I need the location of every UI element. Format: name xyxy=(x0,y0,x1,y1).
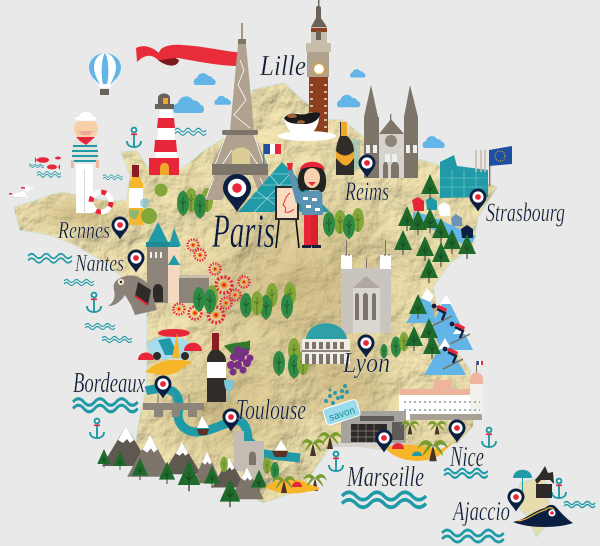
hot air balloon xyxy=(89,53,121,95)
painter woman xyxy=(287,162,326,248)
seagulls xyxy=(9,185,34,198)
tree cluster Reims south xyxy=(323,208,364,239)
Corsica island xyxy=(516,476,552,537)
label Nantes: Nantes xyxy=(74,251,124,277)
lighthouse xyxy=(149,94,179,175)
Marseille building xyxy=(333,411,413,447)
Nantes castle xyxy=(146,222,209,303)
elephant xyxy=(108,275,157,315)
Toulouse pin xyxy=(222,408,240,432)
teal parasol Corsica xyxy=(513,470,532,492)
palms and beach south coast xyxy=(300,421,456,491)
tree cluster centre xyxy=(193,282,296,320)
Strasbourg pin xyxy=(470,188,486,212)
map of France paper land xyxy=(13,82,498,504)
camper van beach Bordeaux xyxy=(138,329,202,375)
Rennes pin xyxy=(112,216,128,240)
Lyon basilica xyxy=(341,240,391,333)
red wine bottle, grapes, glass xyxy=(207,333,254,402)
savon soap bar: savon xyxy=(328,405,357,424)
Paris pin xyxy=(223,174,251,212)
tree cluster right xyxy=(273,338,309,379)
south beach and palm xyxy=(265,476,316,494)
champagne bottle xyxy=(336,122,360,175)
Reims pin xyxy=(358,154,376,178)
Marseille pin xyxy=(376,430,392,452)
trees by Lyon xyxy=(380,332,409,359)
easel with portrait xyxy=(275,186,299,248)
waves south xyxy=(73,399,595,542)
Napoleon bicorne hat xyxy=(513,505,573,527)
label Lille: Lille xyxy=(259,50,306,82)
Bordeaux bridge xyxy=(143,394,204,417)
Bordeaux pin xyxy=(154,376,172,398)
tree cluster Paris west xyxy=(177,188,213,219)
Napoleon statue xyxy=(535,466,554,498)
tricolour on Nice palace xyxy=(476,361,483,373)
Nice pin xyxy=(448,420,466,442)
boats on the river xyxy=(197,416,288,457)
soap bubbles xyxy=(324,384,349,405)
Alps with skiers xyxy=(405,288,473,375)
river east houses and trees xyxy=(394,174,476,283)
label Strasbourg: Strasbourg xyxy=(486,198,565,227)
decorative waves west coast xyxy=(28,254,132,342)
city labels xyxy=(57,50,565,526)
red flowers xyxy=(174,240,250,323)
label Toulouse: Toulouse xyxy=(236,395,306,426)
Eiffel tower xyxy=(205,23,285,200)
red banner xyxy=(136,45,246,66)
french flag xyxy=(263,144,281,166)
label Rennes: Rennes xyxy=(57,218,110,244)
mussels bowl xyxy=(278,112,336,141)
Lyon pin xyxy=(358,334,374,358)
anchors west xyxy=(87,292,104,438)
label Nice: Nice xyxy=(449,442,484,473)
clouds xyxy=(173,69,445,148)
anchor and wave near lighthouse xyxy=(127,127,206,147)
Bordeaux river xyxy=(146,389,300,458)
white wine bottle, glass and apples xyxy=(129,165,168,227)
Toulouse castle xyxy=(234,431,264,479)
label Bordeaux: Bordeaux xyxy=(73,368,145,399)
sailor xyxy=(71,112,99,214)
label Ajaccio: Ajaccio xyxy=(452,496,510,526)
Nice palace hotel xyxy=(399,372,483,420)
label Marseille: Marseille xyxy=(346,462,424,493)
anchors south xyxy=(329,427,566,498)
small trees near castle xyxy=(220,456,279,480)
label Paris: Paris xyxy=(211,205,275,258)
Nantes pin xyxy=(128,250,144,272)
label Reims: Reims xyxy=(344,177,389,206)
Lille belfry xyxy=(306,0,331,133)
Strasbourg European parliament xyxy=(440,146,512,198)
savon soap bar xyxy=(322,399,361,426)
Ajaccio pin xyxy=(508,488,524,512)
fish and waves left xyxy=(29,156,123,180)
lifebuoy xyxy=(91,192,111,212)
Lyon dome building xyxy=(302,323,350,364)
label Lyon: Lyon xyxy=(342,347,390,379)
Louvre pyramid xyxy=(238,162,330,212)
Reims cathedral xyxy=(364,85,418,178)
Pyrenees mountains and trees xyxy=(97,426,267,507)
